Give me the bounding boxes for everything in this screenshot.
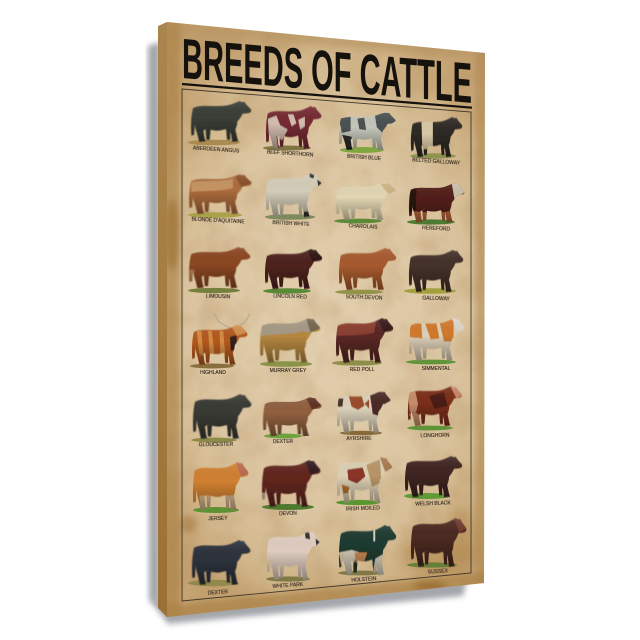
breed: Sussex: SUSSEX [428,568,449,576]
breed: Aberdeen Angus: ABERDEEN ANGUS [193,145,240,155]
breed: Simmental [406,318,465,372]
breed: Ayrshire: AYRSHIRE [346,436,372,442]
breed: Blonde d'Aquitaine: BLONDE D'AQUITAINE [191,217,245,225]
breed: Devon: DEVON [279,511,297,517]
breed: Jersey [193,462,249,522]
breed: Beef Shorthorn: BEEF SHORTHORN [267,149,314,159]
breed: Irish Moiled: IRISH MOILED [346,505,380,513]
breed: Longhorn: LONGHORN [420,433,450,439]
poster face [160,15,490,625]
breed: Dexter (black): DEXTER [208,589,229,597]
breed: Belted Galloway: BELTED GALLOWAY [412,157,461,167]
breed: Limousin: LIMOUSIN [206,294,231,300]
breed: Charolais: CHAROLAIS [348,223,378,231]
breed: Hereford [407,183,465,233]
breed: Lincoln Red: LINCOLN RED [273,293,307,301]
breed: Limousin [188,247,250,300]
breed: Murray Grey [260,318,321,374]
breed: Murray Grey: MURRAY GREY [270,368,307,374]
breed: Aberdeen Angus [188,101,251,155]
breed: South Devon [335,248,396,302]
breed: Red Poll [332,318,394,373]
breed: Hereford: HEREFORD [422,225,451,233]
breed: Red Poll: RED POLL [350,367,375,373]
breed: Sussex [407,518,467,576]
breed: Holstein: HOLSTEIN [351,576,377,584]
infographic: canvas print mockup [146,22,485,628]
breed: Irish Moiled [336,457,393,513]
breed: Dexter (black) [188,540,250,597]
breed: Beef Shorthorn [263,106,321,159]
breed: Blonde d'Aquitaine [188,174,252,225]
breed: Holstein [338,525,396,584]
breed: Dexter: DEXTER [273,439,294,445]
breed grid [188,101,467,597]
breed: Galloway: GALLOWAY [422,296,451,303]
breed: Longhorn [407,386,462,439]
breed: Lincoln Red [263,249,323,301]
breed: Devon [261,460,321,517]
breed: Jersey: JERSEY [208,516,228,522]
breed: British White: BRITISH WHITE [272,220,310,228]
breed: Highland [190,313,250,376]
breed: Gloucester [191,394,251,448]
breed: South Devon: SOUTH DEVON [346,294,383,302]
breed: Dexter [263,397,322,445]
breed: Charolais [334,182,397,231]
title rule [182,84,472,108]
breed: British Blue [339,112,396,162]
breed: Ayrshire [337,391,391,442]
breed: British Blue: BRITISH BLUE [347,154,382,162]
canvas drop shadow [148,42,467,624]
breed: Galloway [404,250,463,303]
inner frame [182,89,471,601]
breed: Welsh Black [404,456,462,508]
breed: Belted Galloway [410,117,462,167]
breed: White Park: WHITE PARK [272,582,304,590]
breed: Gloucester: GLOUCESTER [199,442,234,448]
breed: Welsh Black: WELSH BLACK [415,500,452,508]
breed: White Park [266,531,320,590]
breed: Highland: HIGHLAND [200,370,226,376]
canvas side edge [158,22,167,617]
breed: British White [265,173,322,228]
breed: Simmental: SIMMENTAL [422,366,451,372]
